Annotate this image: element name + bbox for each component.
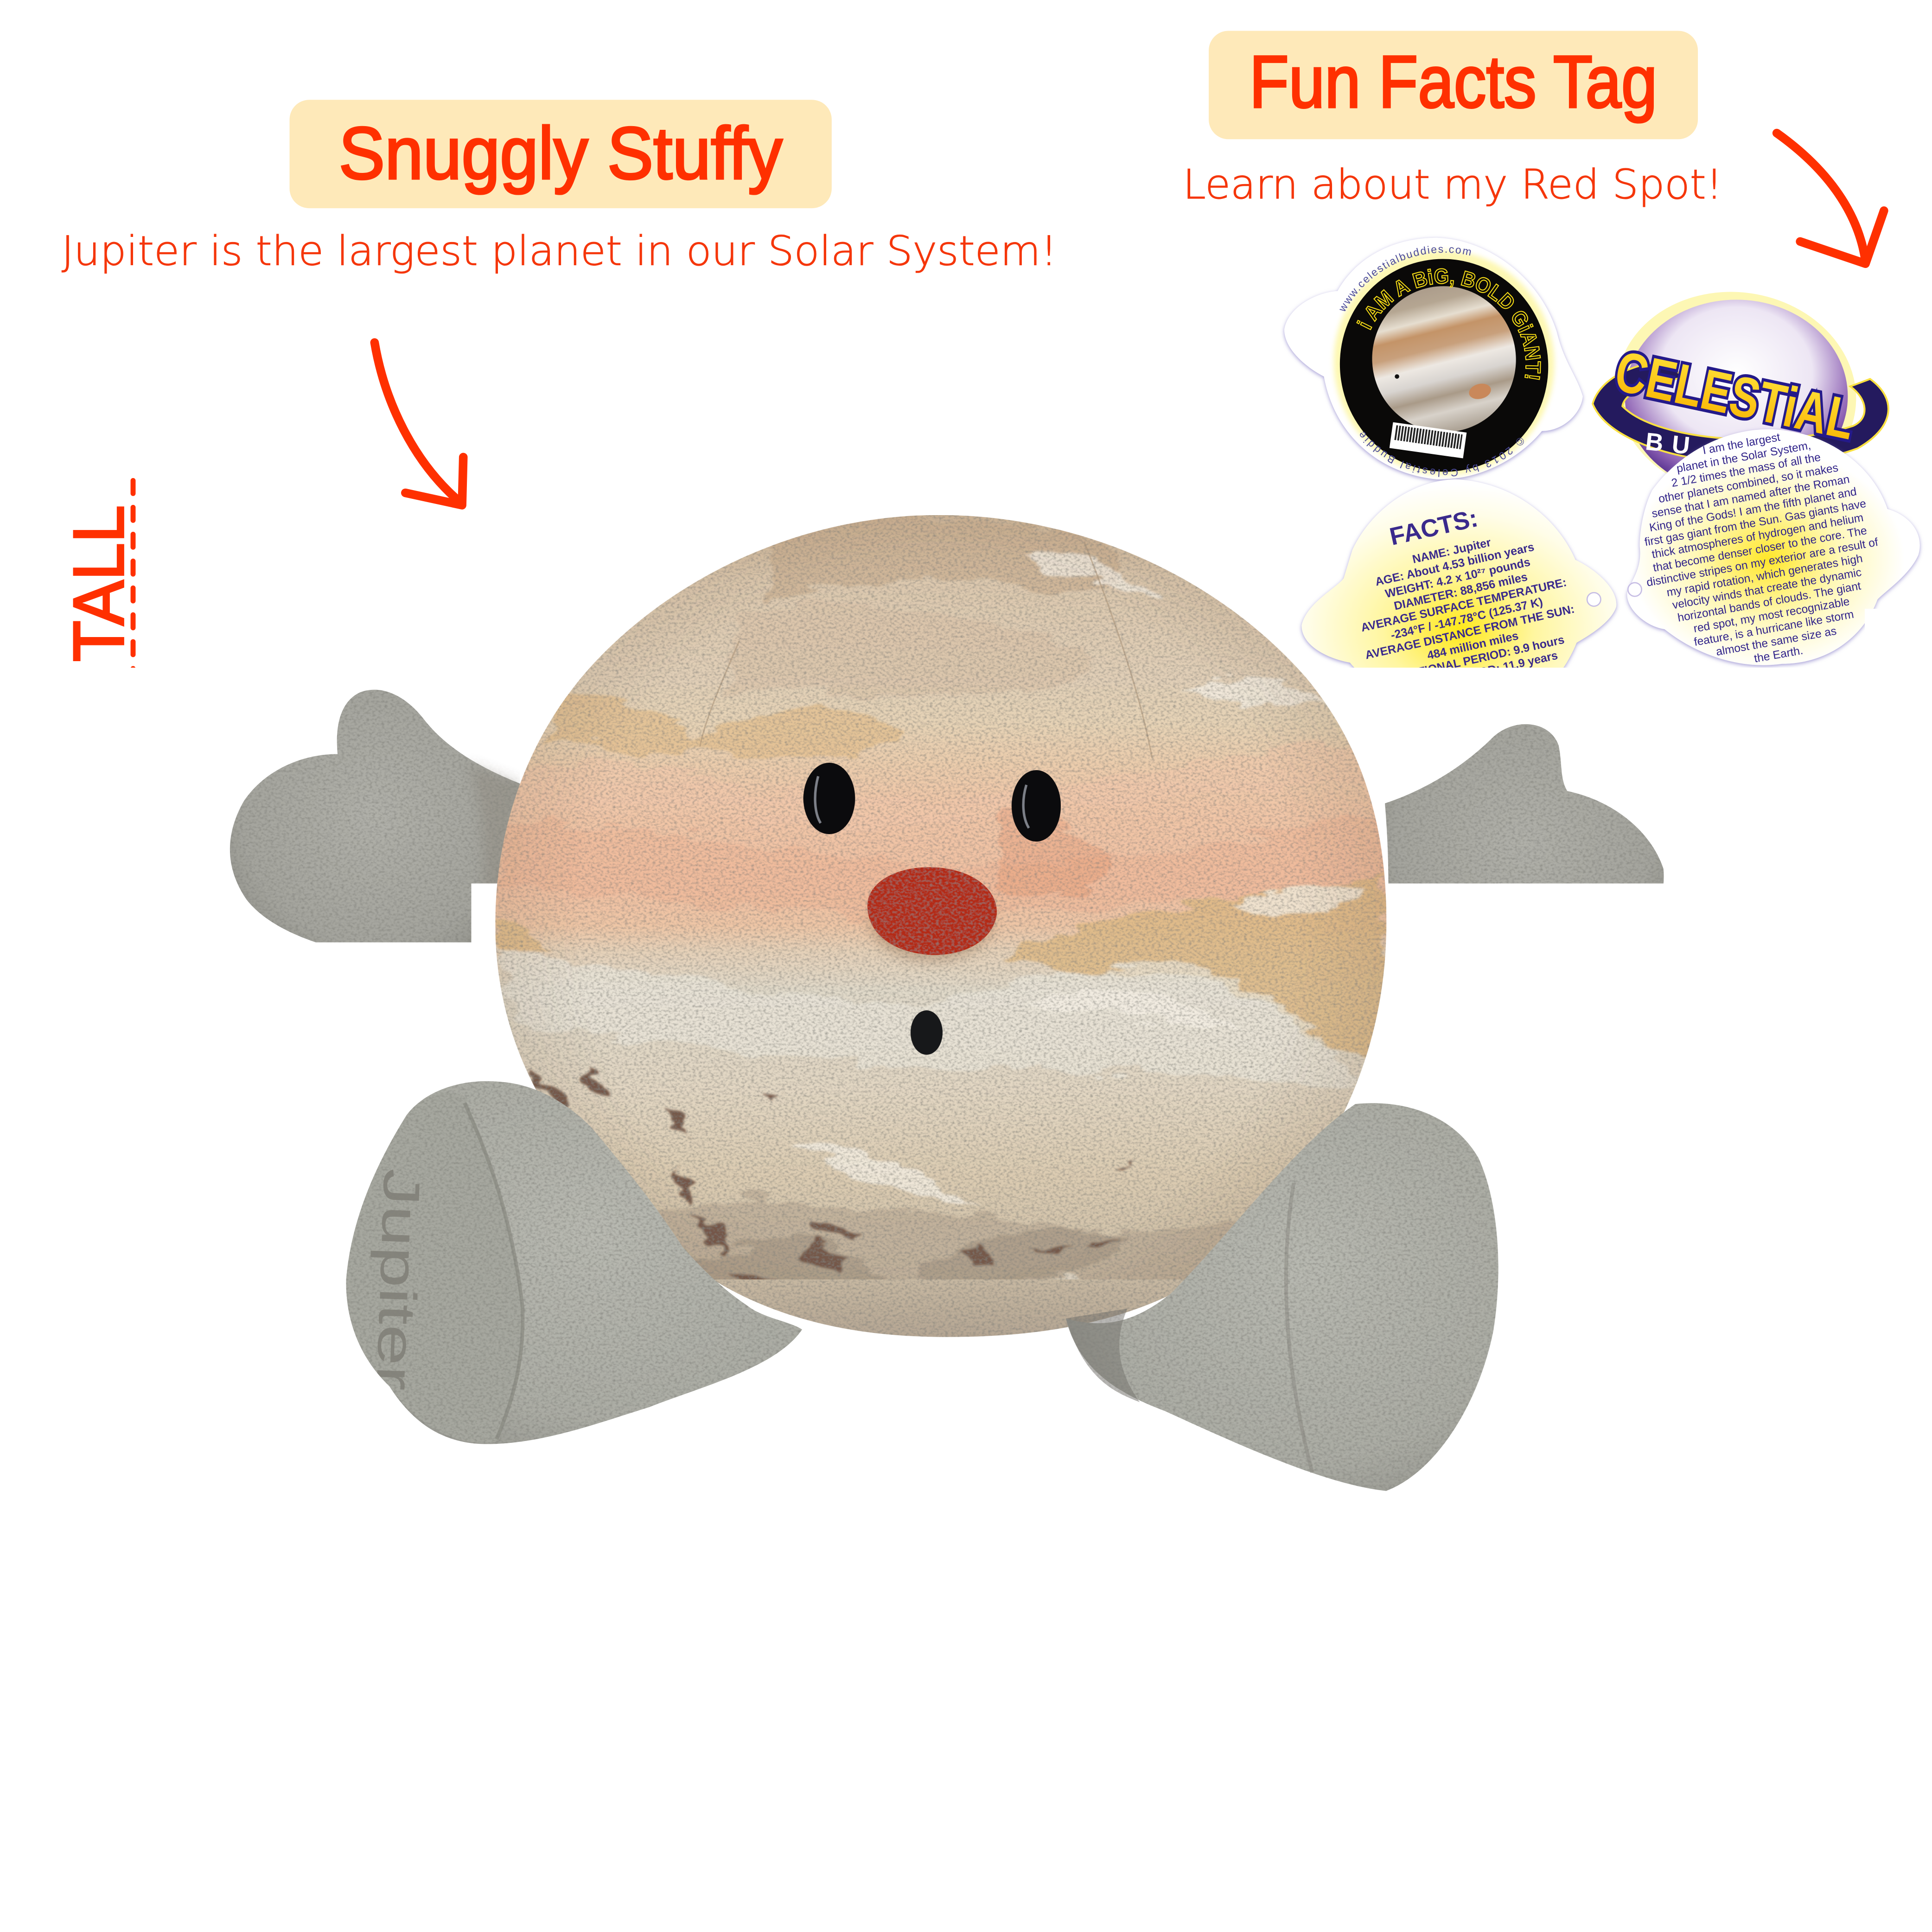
tag: facts <box>1301 479 1616 722</box>
subtitle: Jupiter: Jupiter is the largest planet in our Solar System! <box>62 227 1057 274</box>
barcode <box>1390 422 1467 459</box>
arrow: to plush top <box>375 343 463 505</box>
story text: first gas giant from the Sun. Gas giants have <box>1644 497 1867 548</box>
label box: Embroidered Foot <box>223 1709 807 1817</box>
story text: thick atmospheres of hydrogen and helium <box>1651 511 1864 561</box>
ring headline: i AM A BiG, BOLD GiANT! <box>1353 264 1545 382</box>
fun facts tag set <box>0 0 1920 722</box>
mouth <box>911 1010 943 1055</box>
facts list: -234°F / -147.78°C (125.37 K) <box>1390 595 1544 642</box>
subtitle: made with care: Every Buddy is made with thought and care <box>62 1842 967 1889</box>
label box: Snuggly Stuffy: Snuggly Stuffy <box>339 112 783 194</box>
facts list: DIAMETER: 88,856 miles <box>1393 570 1529 613</box>
embroidered name: Jupiter <box>365 1167 431 1391</box>
facts list: AVERAGE SURFACE TEMPERATURE: <box>1360 576 1568 634</box>
callout: approved for all ages: ages! O+ <box>1594 1178 1842 1260</box>
facts list: 484 million miles <box>1426 629 1520 662</box>
copyright: © 2013 by Celestial Buddies, LLC <box>0 0 1527 479</box>
story text: 2 1/2 times the mass of all the <box>1671 451 1822 490</box>
logo sphere <box>1625 300 1848 493</box>
facts list: ORBITAL PERIOD: 11.9 years <box>1399 649 1559 697</box>
story text: the Earth. <box>1753 644 1804 665</box>
story text: red spot, my most recognizable <box>1693 595 1850 635</box>
story text <box>1625 417 1895 681</box>
story text: horizontal bands of clouds. The giant <box>1677 580 1862 625</box>
left arm <box>230 690 520 969</box>
story text: King of the Gods! I am the fifth planet and <box>1648 485 1858 534</box>
story text: planet in the Solar System, <box>1676 439 1812 475</box>
tag: celestial buddies logo <box>1593 276 1888 511</box>
story text: I am the largest <box>1702 431 1781 457</box>
story text: distinctive stripes on my exterior are a result of <box>1645 536 1879 589</box>
right foot <box>1066 1103 1498 1491</box>
callout: approved for all ages <box>1561 1004 1874 1276</box>
right eye <box>1012 770 1061 842</box>
label box: Snuggly Stuffy <box>290 100 832 208</box>
red spot nose <box>867 867 997 961</box>
dark flecks <box>523 1059 1137 1304</box>
facts list: NAME: Jupiter <box>1411 536 1492 566</box>
plush toy: Jupiter <box>230 493 1664 1491</box>
story text: velocity winds that create the dynamic <box>1671 566 1862 612</box>
facts list: WEIGHT: 4.2 x 10²⁷ pounds <box>1384 555 1531 600</box>
web address: www.celestialbuddies.com <box>1336 243 1473 314</box>
story text: feature, is a hurricane like storm <box>1693 608 1855 649</box>
callout: approved for all ages: Approved <box>1575 1021 1862 1104</box>
jupiter photo <box>1345 261 1543 457</box>
dimension: width: 12” WIDE <box>1413 1562 1708 1642</box>
band markings <box>493 513 1386 1337</box>
tag: celestial buddies logo: BU <box>1644 428 1700 461</box>
dimension: height: 10” TALL <box>58 505 139 791</box>
story text: that become denser closer to the core. The <box>1652 524 1868 574</box>
left eye <box>803 763 855 834</box>
story text: other planets combined, so it makes <box>1658 461 1839 505</box>
seams <box>700 542 1152 758</box>
label box: Embroidered Foot: Embroidered Foot <box>254 1719 774 1801</box>
black ring <box>1317 237 1571 494</box>
logo wordmark: CELESTiAL <box>1610 339 1860 452</box>
subtitle: Red Spot: Learn about my Red Spot! <box>1183 161 1722 208</box>
arrow: to tag <box>1777 133 1884 264</box>
facts list: AGE: About 4.53 billion years <box>1374 541 1536 588</box>
ground shadow <box>474 1334 1392 1466</box>
left foot <box>346 1081 802 1444</box>
story text: sense that I am named after the Roman <box>1651 473 1850 520</box>
facts list: AVERAGE DISTANCE FROM THE SUN: <box>1364 602 1576 662</box>
logo ring <box>1593 362 1888 464</box>
tag: jupiter photo front <box>0 0 1583 499</box>
arrow: to foot <box>212 1421 337 1657</box>
story text: almost the same size as <box>1715 625 1837 658</box>
tag: story <box>1625 417 1920 681</box>
facts heading: FACTS: <box>1387 504 1480 551</box>
body <box>495 515 1386 1337</box>
story text: my rapid rotation, which generates high <box>1666 552 1863 599</box>
callout: approved for all ages: for all <box>1634 1100 1803 1183</box>
right arm <box>1383 724 1664 986</box>
label box: Fun Facts Tag: Fun Facts Tag <box>1250 40 1657 123</box>
facts list: ROTATIONAL PERIOD: 9.9 hours <box>1386 633 1566 685</box>
label box: Fun Facts Tag <box>1209 31 1698 139</box>
facts list <box>1346 521 1585 702</box>
